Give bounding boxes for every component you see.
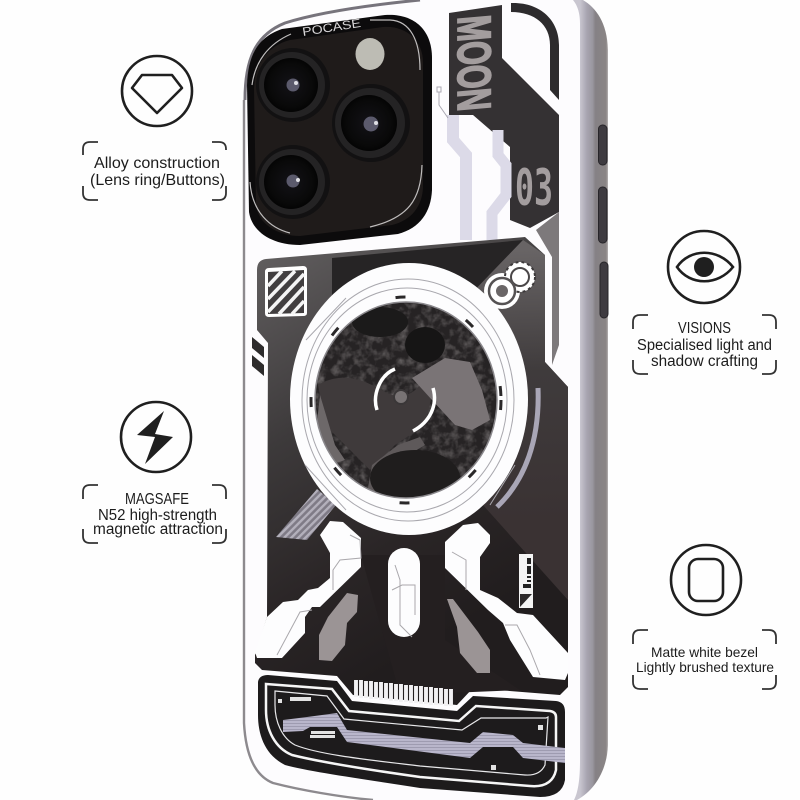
main plate	[252, 237, 568, 706]
leg line work	[277, 535, 540, 675]
lavender ribbon	[283, 713, 565, 763]
label text: Alloy construction	[94, 155, 220, 172]
icon: eye	[668, 231, 740, 303]
right leg	[445, 523, 568, 680]
hatched square	[265, 266, 307, 317]
small label tag	[519, 554, 533, 608]
ring line work	[302, 279, 515, 521]
callout: alloy construction	[83, 56, 226, 200]
lens right	[332, 84, 410, 162]
white arcs	[376, 369, 434, 431]
bracket frame	[633, 315, 776, 374]
label text: Matte white bezel	[651, 644, 758, 660]
side buttons	[598, 125, 608, 318]
lens bottom left	[256, 145, 330, 219]
dark upper panel	[332, 240, 523, 340]
icon: rounded square	[671, 545, 741, 615]
left leg	[255, 521, 361, 658]
side marks	[252, 337, 264, 376]
circuit traces	[437, 87, 506, 240]
white legs	[255, 521, 568, 680]
label text	[93, 491, 223, 538]
gears	[484, 262, 535, 309]
label text	[637, 320, 772, 370]
gray plates	[319, 593, 490, 673]
phone white front	[243, 0, 580, 800]
MOON strip	[448, 5, 559, 365]
center pill	[388, 548, 420, 637]
03 text: 03	[515, 159, 553, 217]
label text: shadow crafting	[651, 353, 758, 370]
bottom circuit plate	[258, 675, 565, 797]
callout: matte white bezel	[633, 545, 776, 689]
label text: magnetic attraction	[93, 521, 223, 538]
label text: Lightly brushed texture	[636, 659, 774, 675]
bracket frame	[83, 142, 226, 200]
callout: magsafe	[83, 402, 226, 543]
lens top left	[256, 48, 330, 122]
flash	[356, 38, 384, 70]
black corner arc	[511, 3, 559, 100]
label text	[90, 155, 225, 189]
bar code stripes	[356, 680, 451, 706]
label text: MAGSAFE	[125, 491, 189, 508]
label text: (Lens ring/Buttons)	[90, 172, 225, 189]
plate white outline	[266, 684, 556, 786]
phone side frame	[540, 0, 608, 800]
phone case	[243, 0, 608, 800]
moon mechanism disc	[315, 302, 497, 506]
label text: Specialised light and	[637, 337, 772, 354]
lavender arc	[497, 388, 538, 507]
MOON text: MOON	[448, 13, 501, 113]
label text: N52 high-strength	[98, 507, 217, 524]
bracket frame	[633, 630, 776, 689]
label text: VISIONS	[678, 320, 731, 337]
callout: visions	[633, 231, 776, 374]
right gray panel	[470, 240, 568, 600]
camera island	[247, 15, 432, 245]
magnetic ring	[290, 263, 528, 535]
dark diagonal band	[361, 555, 520, 695]
icon: lightning bolt	[121, 402, 191, 472]
label text	[636, 644, 774, 675]
icon: diamond	[122, 56, 192, 126]
bracket frame	[83, 485, 226, 543]
brand text: POCASE	[301, 16, 362, 39]
chip dots	[278, 697, 543, 770]
camera highlight arcs	[250, 20, 422, 233]
hatched ribbon	[276, 489, 336, 540]
